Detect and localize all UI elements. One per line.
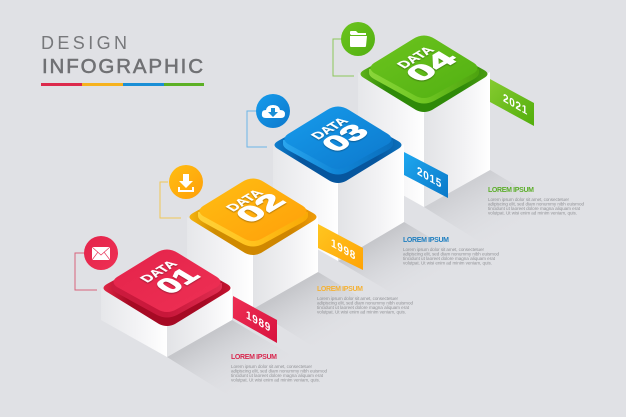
- lorem text 01: tincidunt ut laoreet dolore magna aliquam erat: [231, 373, 324, 378]
- lorem text 03: Lorem ipsum dolor sit amet, consectetuer: [403, 247, 484, 252]
- blue plate: [274, 106, 402, 183]
- cube left face: [358, 72, 424, 207]
- lorem text 03: volutpat. Ut wisi enim ad minim veniam, quis.: [403, 260, 492, 266]
- lorem text 01: [231, 354, 327, 382]
- cube right face: [253, 216, 318, 309]
- connector line: [75, 253, 97, 290]
- cube right face: [167, 287, 232, 357]
- lorem text 02: tincidunt ut laoreet dolore magna aliquam erat: [317, 305, 410, 310]
- connector line: [160, 182, 181, 218]
- lorem text 04: [488, 187, 584, 216]
- block shadow: [167, 320, 304, 402]
- lorem text 02: LOREM IPSUM: [317, 286, 363, 293]
- lorem text 01: adipiscing elit, sed diam nonummy nibh euismod: [231, 368, 327, 374]
- icon: envelope: [84, 236, 118, 270]
- lorem text 01: volutpat. Ut wisi enim ad minim veniam, quis.: [231, 378, 320, 382]
- cube left face: [187, 217, 253, 309]
- icon: cloud download: [256, 94, 290, 128]
- year flag 1989: 1989: [246, 309, 270, 335]
- step 02 block: [160, 165, 390, 354]
- cube right face: [338, 144, 404, 261]
- year flag 1989: [233, 296, 277, 343]
- label: data 02: DATA: [223, 187, 267, 214]
- label: data 03: 03: [315, 120, 375, 156]
- cube left face: [273, 145, 338, 261]
- lorem text 03: LOREM IPSUM: [403, 237, 449, 244]
- block shadow: [424, 170, 562, 252]
- label: data 02: [223, 187, 292, 227]
- title: [41, 33, 203, 78]
- connector line: [333, 39, 354, 76]
- cube right face: [424, 72, 490, 207]
- connector line: [247, 111, 267, 147]
- label: data 01: [137, 258, 206, 298]
- year flag 1998: [318, 224, 363, 270]
- lorem text 04: LOREM IPSUM: [488, 187, 534, 194]
- lorem text 02: [317, 286, 413, 314]
- block shadow: [253, 272, 390, 354]
- year flag 2021: 2021: [503, 92, 528, 118]
- lorem text 04: volutpat. Ut wisi enim ad minim veniam, quis.: [488, 210, 577, 216]
- lorem text 01: LOREM IPSUM: [231, 354, 277, 361]
- icon: download: [169, 165, 203, 199]
- lorem text 04: Lorem ipsum dolor sit amet, consectetuer: [488, 197, 569, 202]
- green plate: [360, 36, 488, 112]
- lorem text 02: volutpat. Ut wisi enim ad minim veniam, quis.: [317, 310, 406, 314]
- step 01 block: [75, 236, 304, 402]
- lorem text 03: adipiscing elit, sed diam nonummy nibh euismod: [403, 252, 499, 256]
- cube left face: [101, 288, 167, 357]
- lorem text 01: Lorem ipsum dolor sit amet, consectetuer: [231, 364, 312, 369]
- label: data 01: 01: [149, 264, 206, 298]
- year flag 2021: [490, 79, 534, 126]
- icon: folder: [341, 22, 375, 56]
- year flag 2015: 2015: [417, 165, 442, 191]
- label: data 02: 02: [229, 189, 292, 227]
- label: data 04: 04: [399, 47, 464, 86]
- heading: design: DESIGN: [41, 33, 127, 53]
- lorem text 02: Lorem ipsum dolor sit amet, consectetuer: [317, 296, 398, 301]
- year flag 2015: [404, 152, 448, 198]
- step 04 block: [333, 22, 562, 252]
- year flag 1998: 1998: [331, 237, 356, 263]
- label: data 01: DATA: [137, 258, 181, 285]
- lorem text 04: tincidunt ut laoreet dolore magna aliquam erat: [488, 206, 581, 211]
- yellow plate: [190, 178, 316, 255]
- label: data 04: [394, 44, 464, 86]
- label: data 03: [308, 115, 375, 156]
- block shadow: [338, 222, 476, 304]
- heading: infographic: INFOGRAPHIC: [42, 55, 203, 78]
- lorem text 04: adipiscing elit, sed diam nonummy nibh euismod: [488, 202, 584, 206]
- label: data 04: DATA: [394, 44, 438, 71]
- colour bar: [41, 83, 204, 86]
- lorem text 02: adipiscing elit, sed diam nonummy nibh euismod: [317, 300, 413, 306]
- red plate: [104, 250, 230, 326]
- step 03 block: [247, 94, 476, 304]
- lorem text 03: [403, 237, 499, 266]
- lorem text 03: tincidunt ut laoreet dolore magna aliquam erat: [403, 256, 496, 261]
- label: data 03: DATA: [308, 115, 352, 142]
